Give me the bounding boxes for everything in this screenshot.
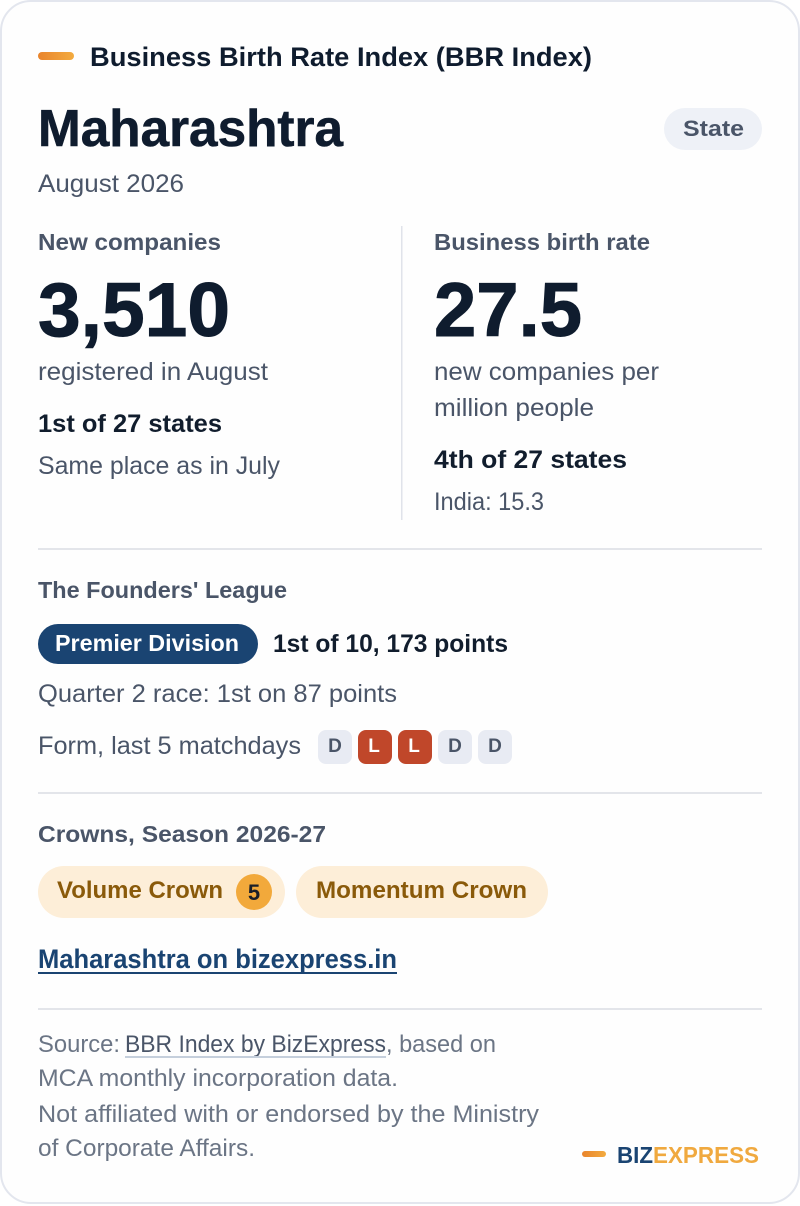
date: August 2026 [38, 170, 184, 198]
panel: business birth rate [434, 229, 659, 516]
form badges: D [488, 736, 502, 757]
league standing: 1st of 10, 173 points [273, 630, 508, 658]
panel: new companies: New companies [38, 229, 221, 255]
panel: business birth rate: Business birth rate [434, 229, 650, 255]
quarter race: Quarter 2 race: 1st on 87 points [38, 680, 397, 708]
panel: business birth rate: new companies per [434, 358, 659, 386]
panel: business birth rate: India: 15.3 [434, 488, 544, 516]
badge: premier division [38, 624, 258, 664]
badge: volume crown [38, 866, 285, 918]
badge: volume crown: Volume Crown [57, 877, 223, 904]
logo: BizExpress: EXPRESS [653, 1142, 759, 1168]
panel: new companies: registered in August [38, 358, 268, 386]
panel: business birth rate: million people [434, 394, 594, 422]
title: Maharashtra: Maharashtra [38, 100, 344, 158]
source note: Not affiliated with or endorsed by the Ministry [38, 1101, 539, 1128]
form badges [318, 730, 512, 764]
badge: volume crown: 5 [248, 880, 260, 905]
source note: MCA monthly incorporation data. [38, 1065, 398, 1092]
badge: premier division: Premier Division [55, 630, 239, 656]
logo: BizExpress: BIZ [617, 1142, 653, 1168]
heading: league: The Founders' League [38, 577, 287, 603]
source note: , based on [386, 1031, 496, 1058]
panel: new companies: Same place as in July [38, 452, 280, 480]
link: maharashtra on bizexpress: Maharashtra on bizexpress.in [38, 944, 397, 974]
form badges: L [368, 736, 380, 757]
heading: crowns: Crowns, Season 2026-27 [38, 821, 326, 847]
tag: State [664, 108, 762, 150]
panel: business birth rate: 4th of 27 states [434, 446, 627, 474]
panel: crowns [38, 821, 548, 918]
form badges: D [448, 736, 462, 757]
panel: new companies: 3,510 [38, 268, 230, 353]
panel: business birth rate: 27.5 [434, 268, 582, 353]
logo: BizExpress [582, 1142, 759, 1168]
badge: momentum crown [296, 866, 548, 918]
form badges: D [328, 736, 342, 757]
panel: new companies [38, 229, 280, 480]
source note: BBR Index by BizExpress [125, 1031, 386, 1058]
panel: the founders' league [38, 577, 512, 764]
source note: of Corporate Affairs. [38, 1135, 255, 1162]
form badges: L [408, 736, 420, 757]
source note: Source: [38, 1031, 120, 1058]
panel: new companies: 1st of 27 states [38, 410, 222, 438]
source note [38, 1031, 539, 1162]
form label: Form, last 5 matchdays [38, 732, 301, 760]
badge: momentum crown: Momentum Crown [316, 877, 527, 904]
header: eyebrow title: Business Birth Rate Index (BBR Index) [90, 42, 592, 72]
tag: State: State [683, 116, 744, 141]
